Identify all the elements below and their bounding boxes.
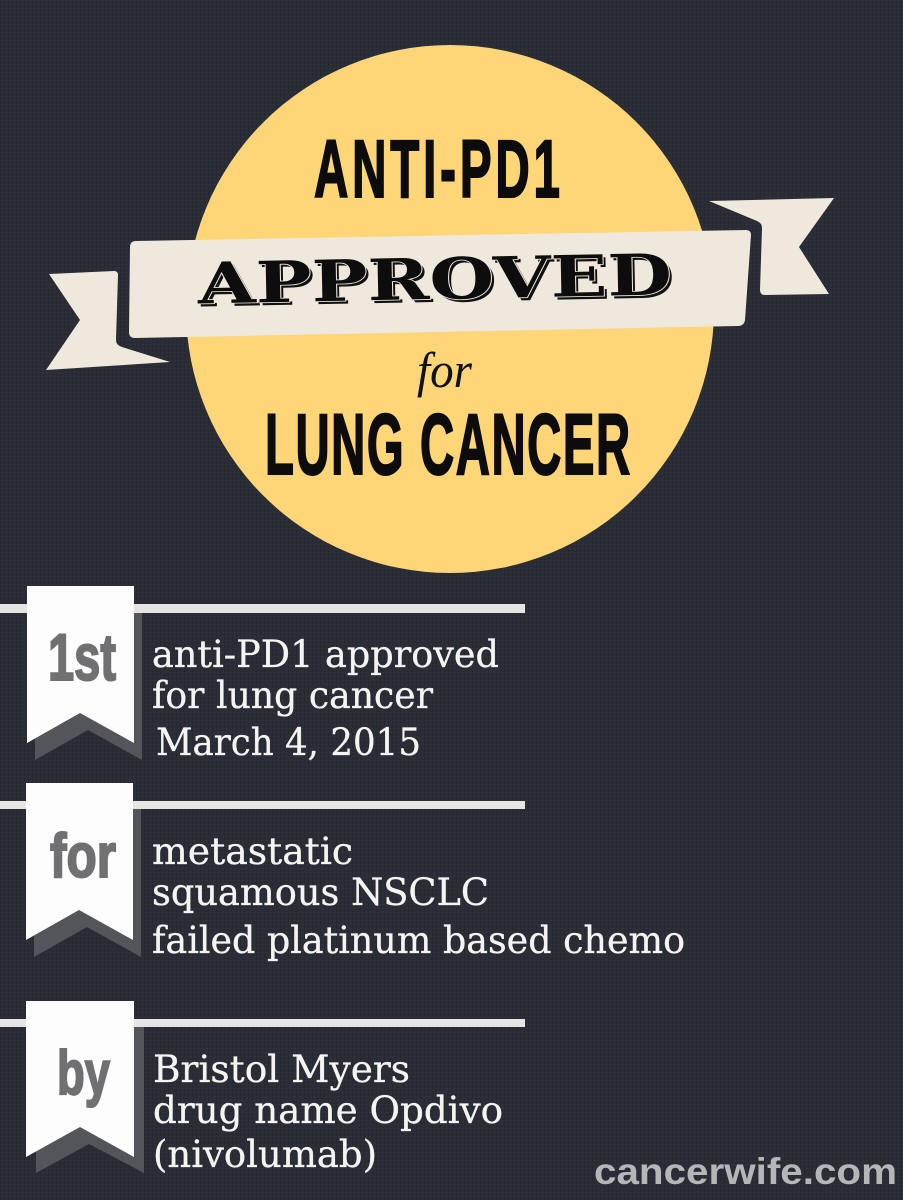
bookmark label: for — [50, 822, 116, 891]
description text: failed platinum based chemo — [152, 919, 685, 962]
divider bar — [0, 1019, 525, 1027]
description text: squamous NSCLC — [152, 871, 489, 914]
divider bar — [0, 604, 525, 613]
description text: Bristol Myers — [153, 1048, 410, 1091]
title: LUNG CANCER: LUNG CANCER — [265, 396, 630, 493]
bookmark shadow — [34, 809, 141, 957]
ribbon band — [129, 230, 751, 338]
description text: (nivolumab) — [153, 1133, 377, 1176]
description text: March 4, 2015 — [156, 721, 421, 764]
description text: drug name Opdivo — [153, 1089, 503, 1132]
bookmark shadow — [35, 613, 142, 760]
bookmark label: by — [57, 1039, 110, 1108]
bookmark shadow — [36, 1027, 144, 1173]
section: by — [0, 1001, 525, 1176]
ribbon text: APPROVED: APPROVED — [199, 244, 676, 321]
section: for — [0, 783, 685, 962]
bookmark — [26, 783, 133, 940]
bookmark label: 1st — [48, 620, 116, 694]
title: ANTI-PD1: ANTI-PD1 — [314, 124, 560, 215]
script word: for: for — [417, 342, 473, 398]
bookmark — [27, 586, 134, 743]
description text — [153, 1048, 503, 1176]
description text — [152, 830, 685, 962]
divider bar — [0, 801, 525, 809]
ribbon left tail — [46, 271, 170, 370]
website credit: cancerwife.com — [594, 1151, 897, 1192]
section: 1st — [0, 586, 525, 764]
bookmark — [26, 1001, 134, 1157]
ribbon text: APPROVED: APPROVED — [196, 241, 672, 318]
description text: anti-PD1 approved — [152, 633, 499, 676]
ribbon right tail — [709, 198, 834, 295]
header badge — [46, 45, 834, 573]
description text: for lung cancer — [152, 674, 433, 717]
ribbon text: APPROVED: APPROVED — [196, 241, 672, 318]
description text: metastatic — [152, 830, 353, 873]
description text — [152, 633, 499, 764]
yellow circle — [186, 45, 714, 573]
